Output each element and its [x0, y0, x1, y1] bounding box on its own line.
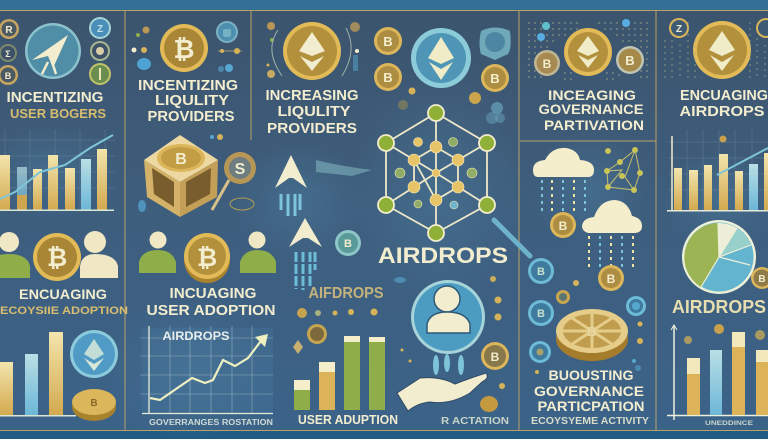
heading: user adoption: USER ADOPTION: [146, 302, 276, 319]
icon: people with coin: ₿: [197, 244, 217, 272]
heading: airdrops: AIRDROPS: [672, 297, 766, 317]
heading: encouraging: ENCUAGING: [19, 287, 107, 302]
icon: bitcoin coin: ₿: [173, 34, 195, 64]
bar chart with trend line: [667, 130, 768, 212]
icon: large governance coin: [556, 309, 628, 361]
icon: small network: [604, 148, 642, 192]
heading: GOVERNANCE: [538, 101, 644, 117]
panel: incentizing liquidity providers: [132, 21, 276, 427]
panel: governance: [494, 19, 649, 427]
icon: teal coins: [528, 258, 646, 363]
icon: treasure box: [144, 135, 218, 217]
icon: ethereum coin: [693, 21, 751, 79]
icon: gold coins: B: [607, 272, 616, 286]
decorative dots: [535, 280, 643, 374]
icon: coins near hand: [480, 342, 509, 412]
icon: small coins left: R: [5, 25, 13, 36]
network diagram: [378, 105, 495, 241]
icon: teal ethereum coin: [70, 330, 118, 378]
panel: incentizing user boosters: [0, 17, 128, 421]
decorative dots: [398, 88, 505, 124]
heading: boosting governance participation: [534, 367, 644, 414]
heading: [680, 88, 768, 120]
icon: gold coin: [751, 267, 768, 289]
icon row: [293, 308, 378, 354]
caption: user adoption: USER ADUPTION: [298, 412, 398, 427]
arrow line to coin: [494, 220, 530, 256]
icon: people with coin: ₿: [47, 244, 67, 272]
icon: flat gold coin: [72, 389, 116, 421]
bar chart with trend line: [0, 130, 115, 211]
heading: LIQULITY: [278, 104, 351, 120]
icon: teal lock coin: [216, 21, 238, 43]
decorative icons: [266, 22, 360, 78]
icon: cloud one: [533, 148, 594, 213]
icon: large governance coin: B: [587, 324, 597, 339]
pie chart: [682, 220, 756, 294]
caption: activation: R ACTATION: [441, 416, 509, 427]
icon: bitcoin coin: [160, 24, 208, 72]
title: airdrops: AIRDROPS: [378, 243, 508, 268]
icon: small coins right: [89, 17, 111, 85]
heading: boosting governance participation: GOVERNANCE: [534, 383, 644, 399]
icon: teal shield: [480, 28, 511, 60]
chart label: AIRDROPS: [162, 329, 230, 343]
label: airdrops: AIFDROPS: [308, 285, 384, 302]
icon: small coins right: Z: [97, 24, 103, 35]
icon: open hand: [397, 373, 487, 411]
heading: ENCUAGING: [680, 88, 768, 104]
icon: key with S: S: [235, 161, 246, 178]
bar chart green: [294, 336, 385, 410]
heading: LIQULITY: [155, 93, 229, 109]
heading: user adoption: INCUAGING: [170, 286, 256, 302]
icon: coins cluster: B: [383, 70, 393, 85]
icon: small coins left: Σ: [5, 49, 11, 59]
icon: plane two: [289, 218, 322, 290]
icon: teal coin: B: [344, 238, 352, 250]
subheading: USER BOGERS: [10, 107, 106, 121]
bar chart lower: [667, 324, 768, 420]
bottom band: [0, 431, 768, 439]
heading: INCREASING: [266, 88, 358, 104]
icon: teal coins: B: [537, 266, 545, 278]
decorative icons lower: [138, 134, 254, 212]
top band: [0, 0, 768, 10]
icon: small coins: B: [543, 57, 552, 71]
icon: people with coin: [0, 231, 118, 281]
icon: user circle: [411, 280, 485, 354]
icon: small coins: B: [625, 53, 635, 68]
icon: teal coins: B: [537, 308, 545, 320]
caption: ecosystem activity: ECOYSYEME ACTIVITY: [531, 415, 649, 427]
decorative streak: [316, 160, 372, 176]
icon: gold coin: [481, 64, 509, 92]
caption: UNEDDINCE: [705, 420, 754, 427]
icon: gold coins: [550, 212, 624, 304]
heading: AIRDROPS: [680, 104, 765, 120]
icon: flat gold coin: B: [90, 398, 98, 409]
icon: small coins left: B: [5, 71, 12, 81]
decorative icons: [132, 26, 242, 72]
heading: user adoption: [146, 286, 276, 319]
heading: [538, 87, 644, 133]
heading: [266, 88, 358, 137]
icon: teal ethereum coin: [411, 28, 471, 88]
decorative dots: [394, 276, 505, 389]
icon: small coins: [534, 46, 644, 76]
icon: gold coin: B: [490, 71, 500, 86]
icon: small coins: Z: [676, 24, 682, 35]
heading: INCENTIZING: [6, 90, 103, 106]
icon: coins cluster: B: [383, 34, 393, 49]
icon: small coins: [669, 18, 768, 38]
icon: gold coins: B: [559, 219, 568, 233]
icon: small coins left: [0, 19, 19, 85]
icon: treasure box: B: [175, 151, 187, 168]
heading: PARTIVATION: [544, 117, 644, 133]
bar chart lower: [0, 332, 76, 416]
heading: boosting governance participation: PARTICPATION: [538, 398, 644, 414]
icon: ethereum coin: [283, 22, 341, 80]
icon: plane one: [275, 155, 307, 216]
dotted grid: [529, 19, 647, 80]
panel: encouraging airdrops: [665, 18, 768, 427]
heading: INCENTIZING: [138, 78, 238, 94]
icon: people with coin: [139, 232, 276, 283]
icon: coins near hand: B: [491, 350, 500, 364]
icon: drops: [433, 354, 464, 375]
icon: ethereum coin: [564, 28, 612, 76]
icon: coins cluster: [374, 27, 402, 91]
dotted grid: [665, 22, 765, 80]
heading: [138, 78, 238, 125]
subheading: ecosystem adoption: ECOYSIIE ADOPTION: [0, 305, 128, 317]
heading: boosting governance participation: BUOUSTING: [548, 367, 634, 383]
icon: teal coin: [335, 230, 361, 256]
line chart: [140, 326, 273, 414]
heading: PROVIDERS: [148, 109, 235, 125]
icon: key with S: [212, 152, 256, 210]
icon: gold coin: B: [758, 274, 766, 285]
icon: cloud two: [582, 200, 642, 268]
panel: increasing liquidity providers and airdrops: [266, 22, 511, 427]
heading: INCEAGING: [548, 87, 636, 103]
caption: GOVERRANGES ROSTATION: [149, 418, 273, 427]
icon: rocket arrow circle: [25, 23, 81, 79]
heading: PROVIDERS: [267, 121, 357, 137]
